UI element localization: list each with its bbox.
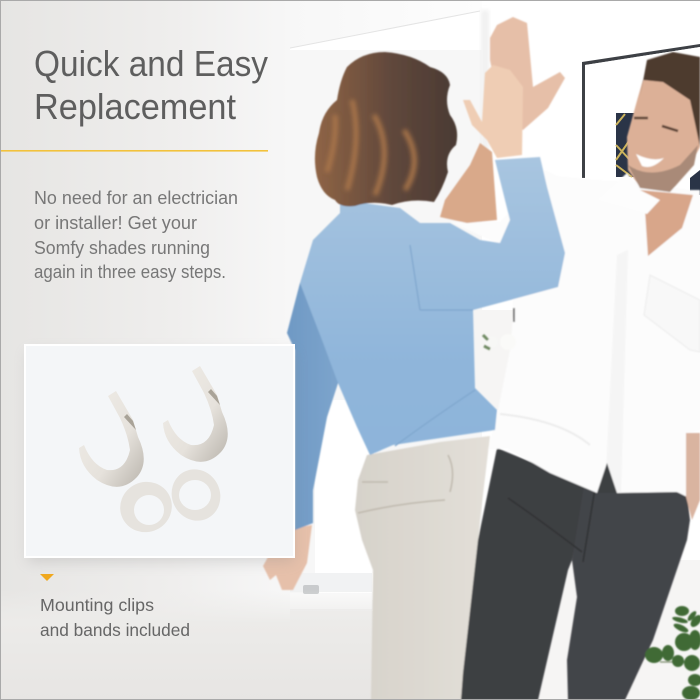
heading (34, 43, 268, 127)
floral decoration (483, 308, 516, 350)
pointer triangle (40, 574, 54, 581)
plant (645, 606, 700, 700)
clip left (79, 391, 144, 487)
clip left notch (124, 414, 136, 430)
woman shirt (287, 157, 565, 530)
heading: Quick and Easy (34, 43, 268, 84)
woman left sleeve shading (287, 283, 338, 530)
caption: and bands included (40, 620, 190, 640)
man raised arm (440, 143, 497, 223)
framed artwork (582, 44, 700, 195)
body text: or installer! Get your (34, 213, 197, 233)
woman lower hand (263, 525, 312, 590)
body text: again in three easy steps. (34, 262, 226, 282)
man shirt (450, 170, 700, 520)
woman raised hand (463, 65, 523, 158)
body text: No need for an electrician (34, 188, 238, 208)
woman trousers (355, 436, 490, 700)
people photo (263, 17, 700, 700)
band left (112, 473, 180, 541)
floor shading (0, 590, 380, 700)
heading: Replacement (34, 86, 236, 127)
woman hair (315, 52, 457, 206)
heading rule (0, 150, 268, 152)
clip right (163, 366, 228, 462)
band right (163, 461, 229, 529)
product card (25, 345, 294, 557)
man raised hand (490, 17, 565, 130)
caption: Mounting clips (40, 595, 154, 615)
left text veil (0, 0, 290, 700)
man pants left leg (461, 448, 590, 700)
man head (597, 52, 700, 256)
shirt creases (395, 245, 475, 446)
product card shadow (28, 352, 294, 562)
body text: Somfy shades running (34, 238, 210, 258)
clip right notch (208, 389, 220, 405)
caption (40, 595, 190, 640)
body text (34, 188, 238, 282)
man pants right leg (567, 470, 690, 700)
